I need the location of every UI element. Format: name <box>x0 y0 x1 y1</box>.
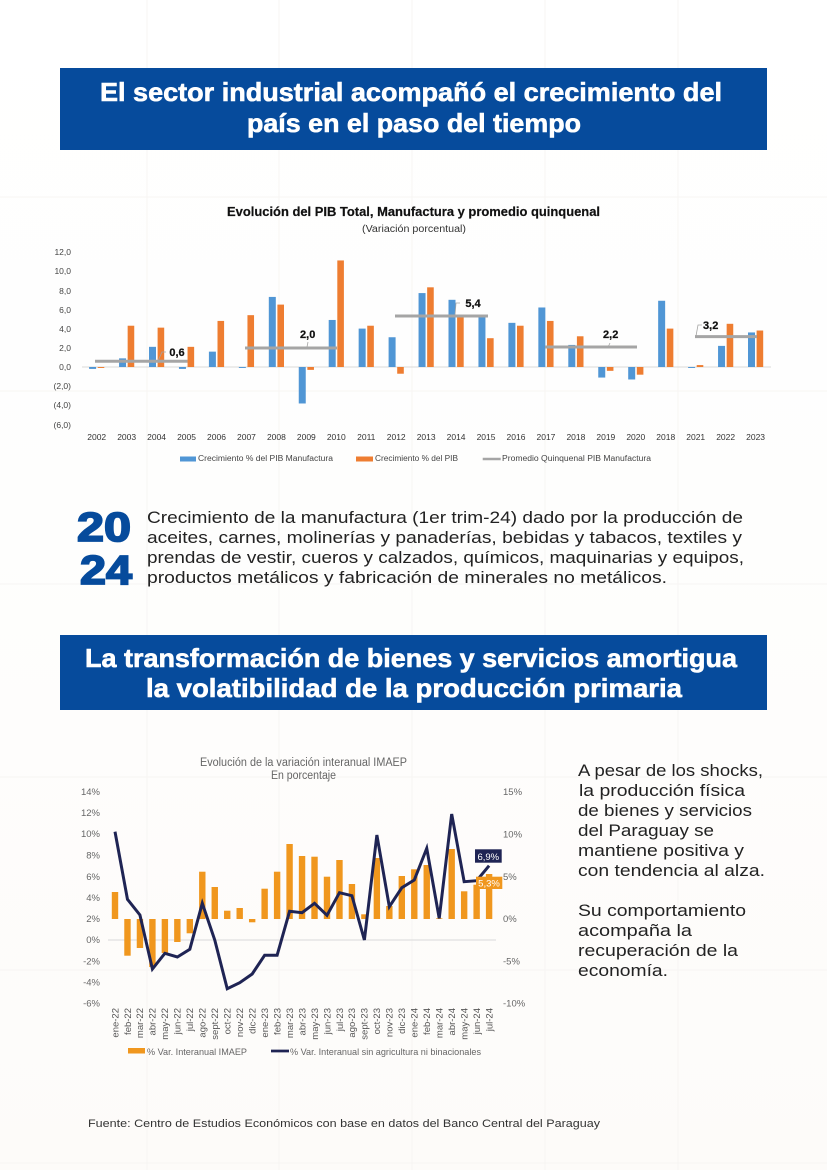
year badge: 2024: 24 <box>80 547 132 593</box>
x axis years: 2011 <box>357 432 376 442</box>
x axis years: 2015 <box>477 432 496 442</box>
y axis labels: (4,0) <box>54 400 71 410</box>
left axis labels: 8% <box>86 850 101 862</box>
x axis months: nov-22 <box>235 1008 246 1037</box>
left axis labels: 14% <box>81 787 101 798</box>
y axis labels: 8,0 <box>59 286 71 296</box>
chart title <box>227 205 600 235</box>
x axis years: 2013 <box>417 432 436 442</box>
x axis years: 2003 <box>117 432 136 442</box>
x axis months: oct-23 <box>372 1008 383 1034</box>
left axis labels: -4% <box>83 978 101 988</box>
bars: crecimiento PIB <box>98 260 763 375</box>
x axis years: 2010 <box>327 432 346 442</box>
y axis labels: 4,0 <box>59 324 71 334</box>
legend: Crecimiento % del PIB Manufactura <box>198 454 334 463</box>
x axis years: 2012 <box>387 432 406 442</box>
data labels <box>169 298 718 359</box>
x axis months: ene-22 <box>110 1008 121 1038</box>
right axis labels <box>503 787 526 1010</box>
legend: Promedio Quinquenal PIB Manufactura <box>502 454 652 463</box>
text block: crecimiento de la manufactura: prendas de vestir, cueros y calzados, químicos, maquinarias y equipos, <box>147 548 744 567</box>
callout: 6,9%: 6,9% <box>477 852 500 863</box>
x axis months: may-23 <box>310 1008 321 1040</box>
text block: a pesar de los shocks: A pesar de los shocks, <box>578 762 763 780</box>
x axis months: feb-22 <box>123 1008 134 1035</box>
year badge: 2024 <box>77 504 132 593</box>
data labels: 2,2 <box>603 329 618 341</box>
callout: 6,9% <box>475 849 502 863</box>
text block: a pesar de los shocks: de bienes y servicios <box>578 802 752 820</box>
x axis months: feb-23 <box>272 1008 283 1035</box>
legend: Crecimiento % del PIB <box>375 454 458 463</box>
x axis years: 2021 <box>686 432 705 442</box>
legend: % Var. Interanual IMAEP <box>147 1047 247 1058</box>
right axis labels: 15% <box>503 787 523 798</box>
x axis years <box>87 432 765 442</box>
text block: crecimiento de la manufactura: aceites, carnes, molinerías y panaderías, bebidas y tabacos, textiles y <box>147 528 743 547</box>
x axis months: feb-24 <box>422 1008 433 1035</box>
x axis months: mar-23 <box>285 1008 296 1038</box>
x axis months: may-22 <box>160 1008 171 1040</box>
legend: % Var. Interanual sin agricultura ni binacionales <box>290 1047 481 1058</box>
y axis labels <box>54 247 71 430</box>
x axis months: oct-22 <box>222 1008 234 1034</box>
y axis labels: (6,0) <box>54 420 71 430</box>
x axis months: jul-22 <box>185 1008 196 1032</box>
chart: PIB total, manufactura y promedio quinquenal <box>54 205 771 463</box>
x axis months <box>110 1008 495 1040</box>
heading: transformación de bienes y servicios: La transformación de bienes y servicios amortigua <box>85 643 738 673</box>
heading: sector industrial: país en el paso del tiempo <box>247 108 581 138</box>
x axis months: ago-22 <box>198 1008 209 1038</box>
left axis labels: -6% <box>83 998 101 1010</box>
x axis years: 2016 <box>507 432 526 442</box>
y axis labels: 0,0 <box>59 362 71 372</box>
x axis months: dic-22 <box>248 1008 258 1034</box>
x axis months: abr-23 <box>297 1008 308 1035</box>
text block: crecimiento de la manufactura: Crecimiento de la manufactura (1er trim-24) dado por la producción de <box>147 508 743 527</box>
text block: a pesar de los shocks <box>578 762 765 980</box>
x axis months: nov-23 <box>385 1008 396 1037</box>
x axis months: jun-22 <box>173 1008 184 1035</box>
y axis labels: 10,0 <box>54 266 71 276</box>
x axis years: 2008 <box>267 432 286 442</box>
chart: variación interanual IMAEP <box>81 757 526 1058</box>
left axis labels: 4% <box>86 893 101 904</box>
x axis months: ago-23 <box>347 1008 358 1038</box>
source note: Fuente: Centro de Estudios Económicos con base en datos del Banco Central del Paraguay <box>88 1118 601 1130</box>
heading: sector industrial <box>60 68 767 150</box>
x axis years: 2023 <box>746 432 765 442</box>
left axis labels: 6% <box>86 872 101 883</box>
x axis years: 2018 <box>566 432 586 442</box>
x axis months: may-24 <box>460 1008 470 1040</box>
x axis months: ene-24 <box>410 1008 421 1038</box>
heading: transformación de bienes y servicios <box>60 635 767 710</box>
x axis years: 2014 <box>447 432 466 442</box>
chart title: Evolución de la variación interanual IMAEP <box>200 757 407 769</box>
chart title: En porcentaje <box>271 770 336 782</box>
heading: sector industrial: El sector industrial acompañó el crecimiento del <box>100 77 722 107</box>
legend <box>128 1047 481 1058</box>
text block: crecimiento de la manufactura: productos metálicos y fabricación de minerales no metálicos. <box>147 568 667 587</box>
left axis labels: 2% <box>86 914 101 925</box>
x axis years: 2005 <box>177 432 196 442</box>
bars: crecimiento PIB manufactura <box>89 293 755 403</box>
left axis labels: 0% <box>86 935 101 946</box>
x axis months: abr-22 <box>148 1008 159 1035</box>
x axis years: 2009 <box>297 432 316 442</box>
x axis years: 2017 <box>536 432 556 442</box>
text block: a pesar de los shocks: acompaña la <box>578 922 693 940</box>
y axis labels: 12,0 <box>54 247 71 257</box>
x axis months: abr-24 <box>447 1008 458 1035</box>
x axis months: jun-23 <box>322 1008 333 1035</box>
x axis months: sept-23 <box>360 1008 371 1040</box>
line: variación sin agricultura ni binacionales <box>115 814 489 989</box>
callout: 5,3%: 5,3% <box>478 878 500 890</box>
legend <box>180 454 652 463</box>
text block: a pesar de los shocks: Su comportamiento <box>578 902 746 920</box>
x axis months: mar-22 <box>135 1008 146 1038</box>
data labels: 5,4 <box>465 298 482 310</box>
x axis years: 2007 <box>237 432 256 442</box>
data labels: 0,6 <box>169 347 185 359</box>
chart title: Evolución del PIB Total, Manufactura y promedio quinquenal <box>227 205 600 219</box>
x axis months: sept-22 <box>210 1008 221 1040</box>
data labels: 3,2 <box>703 320 718 332</box>
x axis years: 2019 <box>596 432 616 442</box>
right axis labels: 5% <box>503 872 517 883</box>
right axis labels: -5% <box>503 956 520 968</box>
left axis labels <box>81 787 101 1010</box>
data labels: 2,0 <box>300 329 315 341</box>
x axis years: 2004 <box>147 432 166 442</box>
x axis months: dic-23 <box>397 1008 408 1034</box>
text block: a pesar de los shocks: la producción física <box>579 782 746 800</box>
x axis years: 2020 <box>626 432 646 442</box>
x axis years: 2002 <box>87 432 106 442</box>
bars: variación interanual IMAEP <box>112 844 492 967</box>
x axis months: jul-23 <box>335 1008 346 1032</box>
right axis labels: 10% <box>503 830 523 840</box>
right axis labels: -10% <box>503 998 526 1010</box>
promedio quinquenal lines <box>95 303 757 361</box>
text block: a pesar de los shocks: economía. <box>578 962 668 980</box>
y axis labels: 2,0 <box>59 343 71 353</box>
x axis years: 2022 <box>716 432 735 442</box>
left axis labels: 10% <box>81 829 101 840</box>
x axis months: ene-23 <box>260 1008 271 1038</box>
chart title: (Variación porcentual) <box>362 224 466 235</box>
heading: transformación de bienes y servicios: la volatibilidad de la producción primaria <box>146 673 683 703</box>
y axis labels: 6,0 <box>59 305 71 315</box>
x axis years: 2018 <box>656 432 675 442</box>
text block: crecimiento de la manufactura <box>147 508 744 587</box>
x axis years: 2006 <box>207 432 226 442</box>
x axis months: jul-24 <box>484 1008 495 1032</box>
left axis labels: -2% <box>83 956 101 968</box>
y axis labels: (2,0) <box>54 381 71 391</box>
year badge: 2024: 20 <box>77 504 131 550</box>
text block: a pesar de los shocks: con tendencia al alza. <box>578 862 765 880</box>
right axis labels: 0% <box>503 914 517 925</box>
text block: a pesar de los shocks: del Paraguay se <box>578 822 714 840</box>
chart title <box>200 757 407 782</box>
x axis months: mar-24 <box>434 1008 446 1038</box>
x axis months: jun-24 <box>472 1008 483 1035</box>
text block: a pesar de los shocks: mantiene positiva y <box>578 842 745 860</box>
text block: a pesar de los shocks: recuperación de la <box>578 942 739 960</box>
left axis labels: 12% <box>81 808 101 819</box>
